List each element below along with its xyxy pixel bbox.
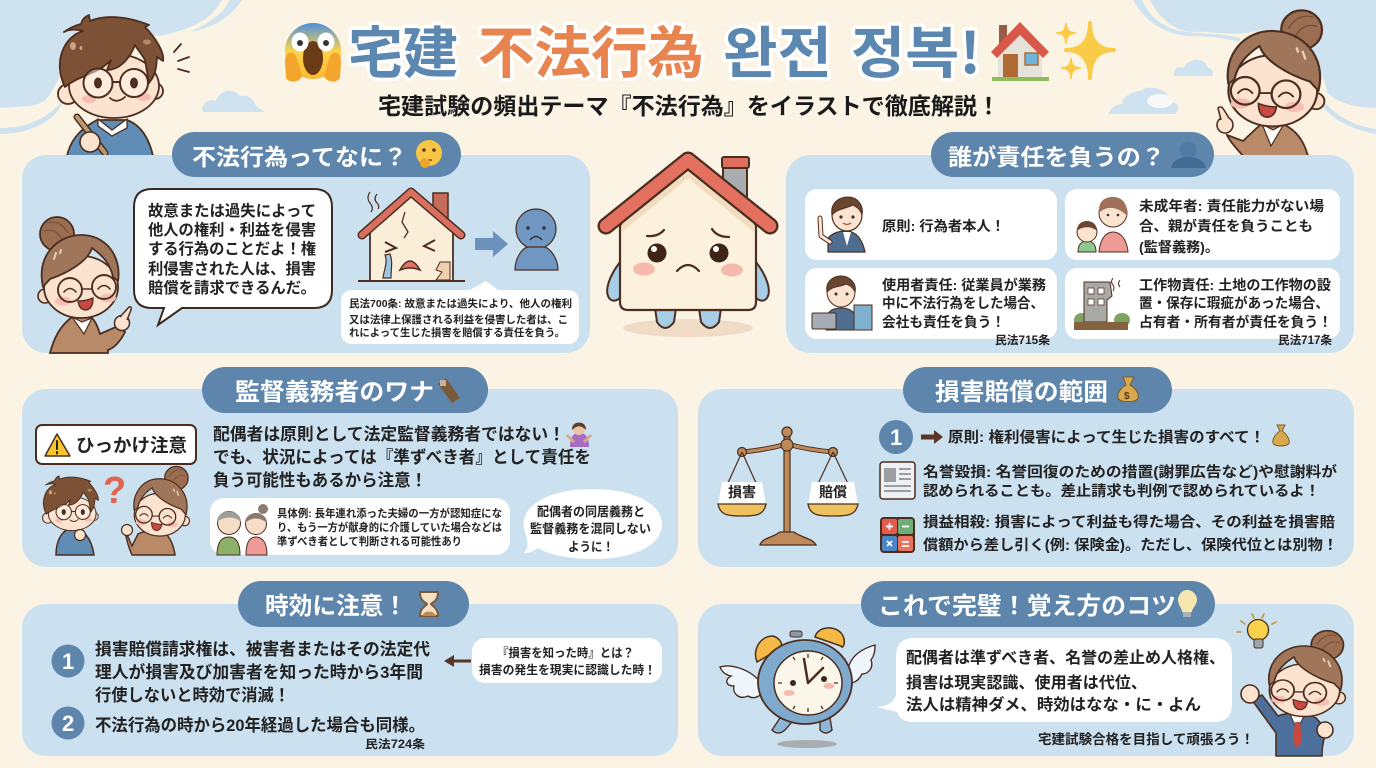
heading pill: 誰が責任を負うの？: [948, 144, 1165, 170]
top-left cloud backdrop: [0, 0, 242, 134]
card: minors: [1065, 189, 1340, 260]
arrow: [921, 430, 943, 444]
title text: Korean 2: 정복!: [851, 9, 981, 90]
caution bubble: 配偶者の同居義務と: [537, 504, 645, 519]
speech bubble: [134, 189, 332, 325]
badge 2: 2: [62, 711, 74, 736]
speech bubble: 利侵害された人は、損害: [148, 259, 316, 278]
heading pill: $: [1124, 391, 1130, 402]
offset text: 償額から差し引く(例: 保険金)。ただし、保険代位とは別物！: [923, 536, 1338, 554]
icon: money bag: [1273, 425, 1289, 446]
example box: り、もう一方が献身的に介護していた場合などは: [277, 520, 502, 534]
top-right cloud backdrop: [1133, 0, 1376, 134]
speech bubble: 賠償を請求できるんだ。: [148, 278, 316, 297]
heading pill: 不法行為ってなに？: [192, 144, 407, 170]
speech bubble: 損害は現実認識、使用者は代位、: [906, 673, 1147, 692]
heading pill: [931, 132, 1214, 177]
offset text: 損益相殺: 損害によって利益も得た場合、その利益を損害賠: [923, 513, 1336, 531]
encouragement text: 宅建試験合格を目指して頑張ろう！: [1038, 731, 1254, 747]
heading pill: これで完璧！覚え方のコツ: [878, 593, 1176, 620]
card: minors: 未成年者: 責任能力がない場: [1139, 198, 1324, 214]
panel background: [786, 155, 1354, 353]
heading pill: [172, 132, 461, 177]
scales of justice: 賠償: [819, 484, 847, 500]
law note: 民法700条: 故意または過失により、他人の権利: [349, 297, 572, 310]
speech bubble: 法人は精神ダメ、時効はなな・に・よん: [906, 695, 1201, 714]
title text: Korean 1: 완전: [723, 9, 832, 90]
badge 1: 1: [62, 649, 74, 674]
citation: article 715: 民法715条: [995, 333, 1051, 347]
rule 1: 損害賠償請求権は、被害者またはその法定代: [95, 639, 430, 659]
icon: screaming face: [285, 23, 341, 82]
rule 2: 不法行為の時から20年経過した場合も同様。: [95, 715, 425, 735]
main explanation: 負う可能性もあるから注意！: [213, 470, 427, 490]
arrow: [475, 231, 508, 257]
heading pill: 損害賠償の範囲: [935, 379, 1108, 406]
number badge 1: [879, 420, 913, 454]
number badge 1: 1: [890, 425, 902, 450]
card: structure liability: 占有者・所有者が責任を負う！: [1139, 314, 1332, 330]
icon: house: [991, 22, 1049, 81]
heading pill: [238, 581, 469, 627]
panel background: [22, 389, 678, 567]
icon: sparkles: [1057, 23, 1114, 78]
defamation text: [923, 463, 1338, 500]
law note: れによって生じた損害を賠償する責任を負う。: [349, 326, 565, 339]
defamation text: 名誉毀損: 名誉回復のための措置(謝罪広告など)や慰謝料が: [923, 463, 1338, 481]
card: employer liability: 中に不法行為をした場合、: [882, 295, 1044, 311]
example box: 準ずべき者として判断される可能性あり: [277, 534, 462, 548]
citation: article 717: 民法717条: [1278, 333, 1333, 347]
speech bubble: 配偶者は準ずべき者、名誉の差止め人格権、: [906, 648, 1225, 667]
heading pill: [202, 367, 488, 413]
panel: what is a tort: [22, 132, 590, 353]
speech bubble: [877, 638, 1232, 722]
badge 2: [52, 706, 84, 740]
card: structure liability: 置・保存に瑕疵があった場合、: [1139, 295, 1329, 311]
card: minors: (監督義務)。: [1139, 239, 1219, 255]
panel: limitation period: [22, 581, 678, 756]
character: cheering woman: [1241, 631, 1345, 756]
panel: supervisor trap: [22, 367, 678, 567]
warning sign: ひっかけ注意: [76, 435, 187, 456]
caution bubble: [524, 489, 662, 559]
example box: 具体例: 長年連れ添った夫婦の一方が認知症にな: [277, 506, 502, 520]
card: minors: 合、親が責任を負うことも: [1139, 218, 1313, 234]
panel background: [698, 389, 1354, 567]
speech bubble: する行為のことだよ！権: [148, 239, 316, 258]
panel background: [22, 155, 590, 353]
rule 1: 理人が損害及び加害者を知った時から3年間: [95, 662, 423, 682]
card: employer liability: 使用者責任: 従業員が業務: [882, 277, 1046, 293]
heading pill: [903, 367, 1172, 413]
defamation text: 認められることも。差止請求も判例で認められているよ！: [923, 482, 1320, 500]
card: employer liability: [805, 268, 1057, 339]
main explanation: 配偶者は原則として法定監督義務者ではない！: [213, 425, 565, 444]
heading pill: [861, 581, 1215, 627]
character: explaining woman: [38, 217, 131, 353]
scales of justice: [718, 427, 858, 545]
panel: who is liable: [786, 132, 1354, 353]
icon: shrugging woman: [567, 422, 591, 447]
citation: 民法724条: [365, 737, 426, 751]
main explanation: でも、状況によっては『準ずべき者』として責任を: [213, 447, 591, 467]
panel: memory tips: [698, 581, 1354, 756]
panel background: [698, 604, 1354, 756]
scales of justice: 損害: [728, 484, 756, 500]
title text: blue: 宅建: [348, 9, 458, 90]
mascot: sad house: [606, 157, 770, 337]
subtitle: 宅建試験の頻出テーマ『不法行為』をイラストで徹底解説！: [378, 93, 1000, 119]
heading pill: 監督義務者のワナ: [235, 379, 434, 406]
icon: crying damaged house: [358, 192, 465, 281]
law note: 又は法律上保護される利益を侵害した者は、こ: [349, 313, 568, 326]
caution bubble: ように！: [568, 540, 614, 554]
speech bubble: 故意または過失によって: [148, 202, 316, 220]
rule 1: 行使しないと時効で消滅！: [95, 686, 290, 705]
icon: newspaper: [880, 462, 915, 499]
small clouds: [202, 60, 1213, 114]
title text: orange: 不法行為: [478, 9, 704, 90]
character: woman top-right: [1217, 10, 1324, 156]
badge 1: [52, 644, 84, 678]
note box: [472, 638, 662, 683]
card: principle: 原則: 行為者本人！: [882, 218, 1005, 234]
card: principle: [805, 189, 1057, 260]
icon: light bulb: [1237, 614, 1276, 648]
rule 1: [95, 639, 430, 705]
question mark: ?: [103, 470, 126, 512]
principle line: 原則: 権利侵害によって生じた損害のすべて！: [948, 428, 1265, 446]
law note: [341, 281, 579, 344]
card: structure liability: [1065, 268, 1340, 339]
panel background: [22, 604, 678, 756]
icon: sad person: [515, 209, 558, 270]
heading pill: 時効に注意！: [265, 593, 407, 620]
arrow: [444, 655, 471, 667]
character: man top-left: [58, 15, 189, 156]
note box: 『損害を知った時』とは？: [497, 645, 634, 660]
offset text: [923, 513, 1338, 554]
caution bubble: 監督義務を混同しない: [530, 521, 651, 536]
card: employer liability: 会社も責任を負う！: [882, 314, 1005, 330]
title: [285, 9, 1114, 90]
panel: scope of damages: [698, 367, 1354, 567]
icon: calculator: [880, 517, 915, 553]
warning sign: [36, 425, 196, 464]
main explanation: [213, 425, 591, 490]
characters: confused man and woman: [43, 466, 189, 555]
note box: 損害の発生を現実に認識した時！: [479, 662, 656, 677]
icon: winged clock: [720, 628, 875, 748]
card: structure liability: 工作物責任: 土地の工作物の設: [1139, 277, 1331, 293]
example box: [210, 498, 510, 555]
speech bubble: 他人の権利・利益を侵害: [148, 220, 316, 239]
